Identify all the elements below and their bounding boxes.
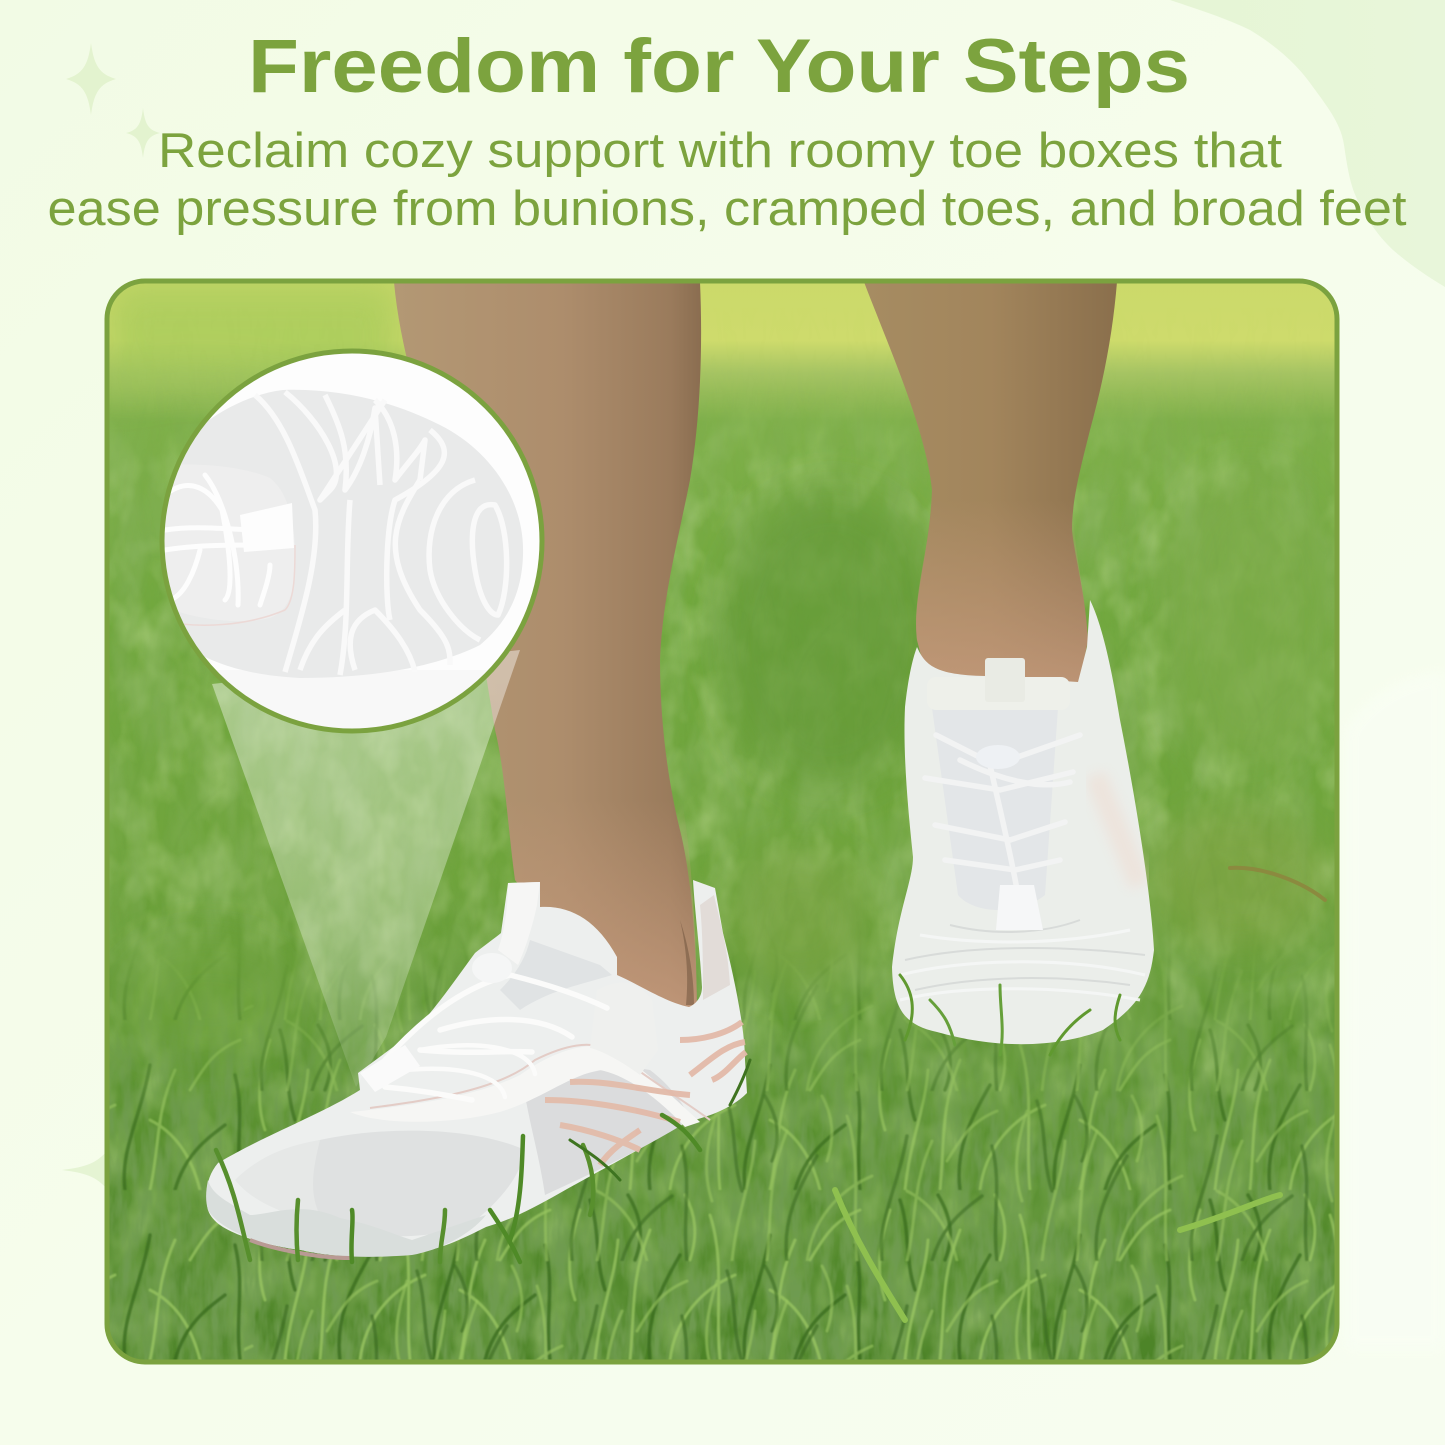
foreground grass over shoes [216,868,1325,1320]
upper mesh tongue [500,940,612,1010]
tongue loop [498,882,540,965]
white overlay band [350,1046,700,1127]
panel border [107,281,1337,1362]
forefoot mesh [313,1130,520,1236]
rear leg [864,282,1117,690]
background field [110,284,405,368]
title: Freedom for Your Steps [248,24,1190,109]
icon: sparkle lower left [62,1150,108,1190]
pull tab [985,658,1025,677]
pink stripes [545,1022,746,1165]
rear shoe [892,600,1154,1044]
callout beam [212,650,520,1087]
grass mottling [120,470,1340,1060]
side pink tint [1095,775,1140,885]
lower right soft shape [1345,672,1445,1350]
subtitle: Reclaim cozy support with roomy toe boxes that [158,124,1282,178]
tongue band [927,677,1070,710]
icon: sparkle small [126,108,160,158]
subtitle [48,124,1407,236]
front shoe [206,880,747,1258]
collar lining [700,895,730,1000]
lace lock [360,1045,420,1092]
panel: photo of shoes on grass [104,278,1340,1364]
grass texture lower [110,970,1334,1360]
lace panel [932,708,1058,910]
saddle panel [590,1044,644,1074]
icon: sparkle large [66,43,116,115]
subtitle: ease pressure from bunions, cramped toes, and broad feet [48,182,1407,236]
sole [206,1180,486,1257]
laces [385,975,607,1100]
decorative corner blob [1170,0,1445,287]
callout: zoomed toe box [160,351,550,740]
front leg [394,282,701,1010]
